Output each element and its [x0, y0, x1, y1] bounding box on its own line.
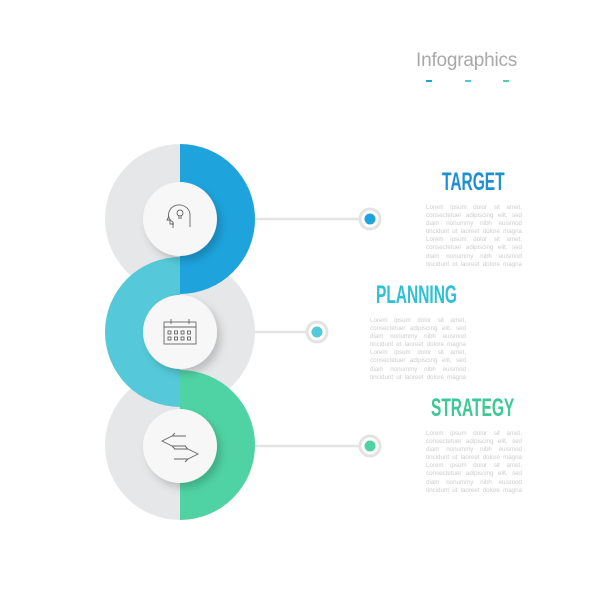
- text: target: consectetuer adipiscing elit, sed: [426, 244, 522, 251]
- text: target: tincidunt ut laoreet dolore magna: [426, 228, 522, 235]
- icon: calendar: [164, 319, 196, 344]
- dots: [307, 209, 380, 456]
- text: target: diam nonummy nibh euismod: [426, 220, 522, 227]
- icon: swap arrows: [162, 433, 198, 462]
- text: planning: consectetuer adipiscing elit, sed: [370, 325, 466, 332]
- text: target: tincidunt ut laoreet dolore magna: [426, 261, 522, 268]
- text: target: diam nonummy nibh euismod: [426, 253, 522, 260]
- white discs: [143, 182, 217, 483]
- text: strategy: tincidunt ut laoreet dolore magna: [426, 487, 522, 494]
- heading: TARGET: TARGET: [442, 168, 505, 196]
- text: strategy: consectetuer adipiscing elit, sed: [426, 470, 522, 477]
- text: planning: Lorem ipsum dolor sit amet,: [370, 349, 466, 356]
- text: strategy: [426, 430, 522, 494]
- text: strategy: diam nonummy nibh euismod: [426, 446, 522, 453]
- text: planning: [370, 317, 466, 381]
- title dashes: [426, 80, 509, 82]
- text: target: Lorem ipsum dolor sit amet,: [426, 236, 522, 243]
- text: planning: diam nonummy nibh euismod: [370, 366, 466, 373]
- green half: [180, 370, 255, 520]
- text: planning: consectetuer adipiscing elit, sed: [370, 357, 466, 364]
- teal half: [105, 257, 180, 407]
- heading: STRATEGY: STRATEGY: [431, 394, 514, 422]
- text: target: [426, 204, 522, 268]
- title: Infographics: [416, 50, 517, 71]
- text: strategy: tincidunt ut laoreet dolore magna: [426, 454, 522, 461]
- text: planning: tincidunt ut laoreet dolore magna: [370, 374, 466, 381]
- text: planning: diam nonummy nibh euismod: [370, 333, 466, 340]
- icon: head with bulb: [167, 205, 190, 228]
- heading: PLANNING: PLANNING: [376, 281, 457, 309]
- text: strategy: Lorem ipsum dolor sit amet,: [426, 462, 522, 469]
- text: strategy: Lorem ipsum dolor sit amet,: [426, 430, 522, 437]
- text: strategy: consectetuer adipiscing elit, sed: [426, 438, 522, 445]
- text: target: consectetuer adipiscing elit, sed: [426, 212, 522, 219]
- blue half: [180, 144, 255, 294]
- connectors: [255, 219, 362, 446]
- text: strategy: diam nonummy nibh euismod: [426, 479, 522, 486]
- text: planning: Lorem ipsum dolor sit amet,: [370, 317, 466, 324]
- text: planning: tincidunt ut laoreet dolore magna: [370, 341, 466, 348]
- text: target: Lorem ipsum dolor sit amet,: [426, 204, 522, 211]
